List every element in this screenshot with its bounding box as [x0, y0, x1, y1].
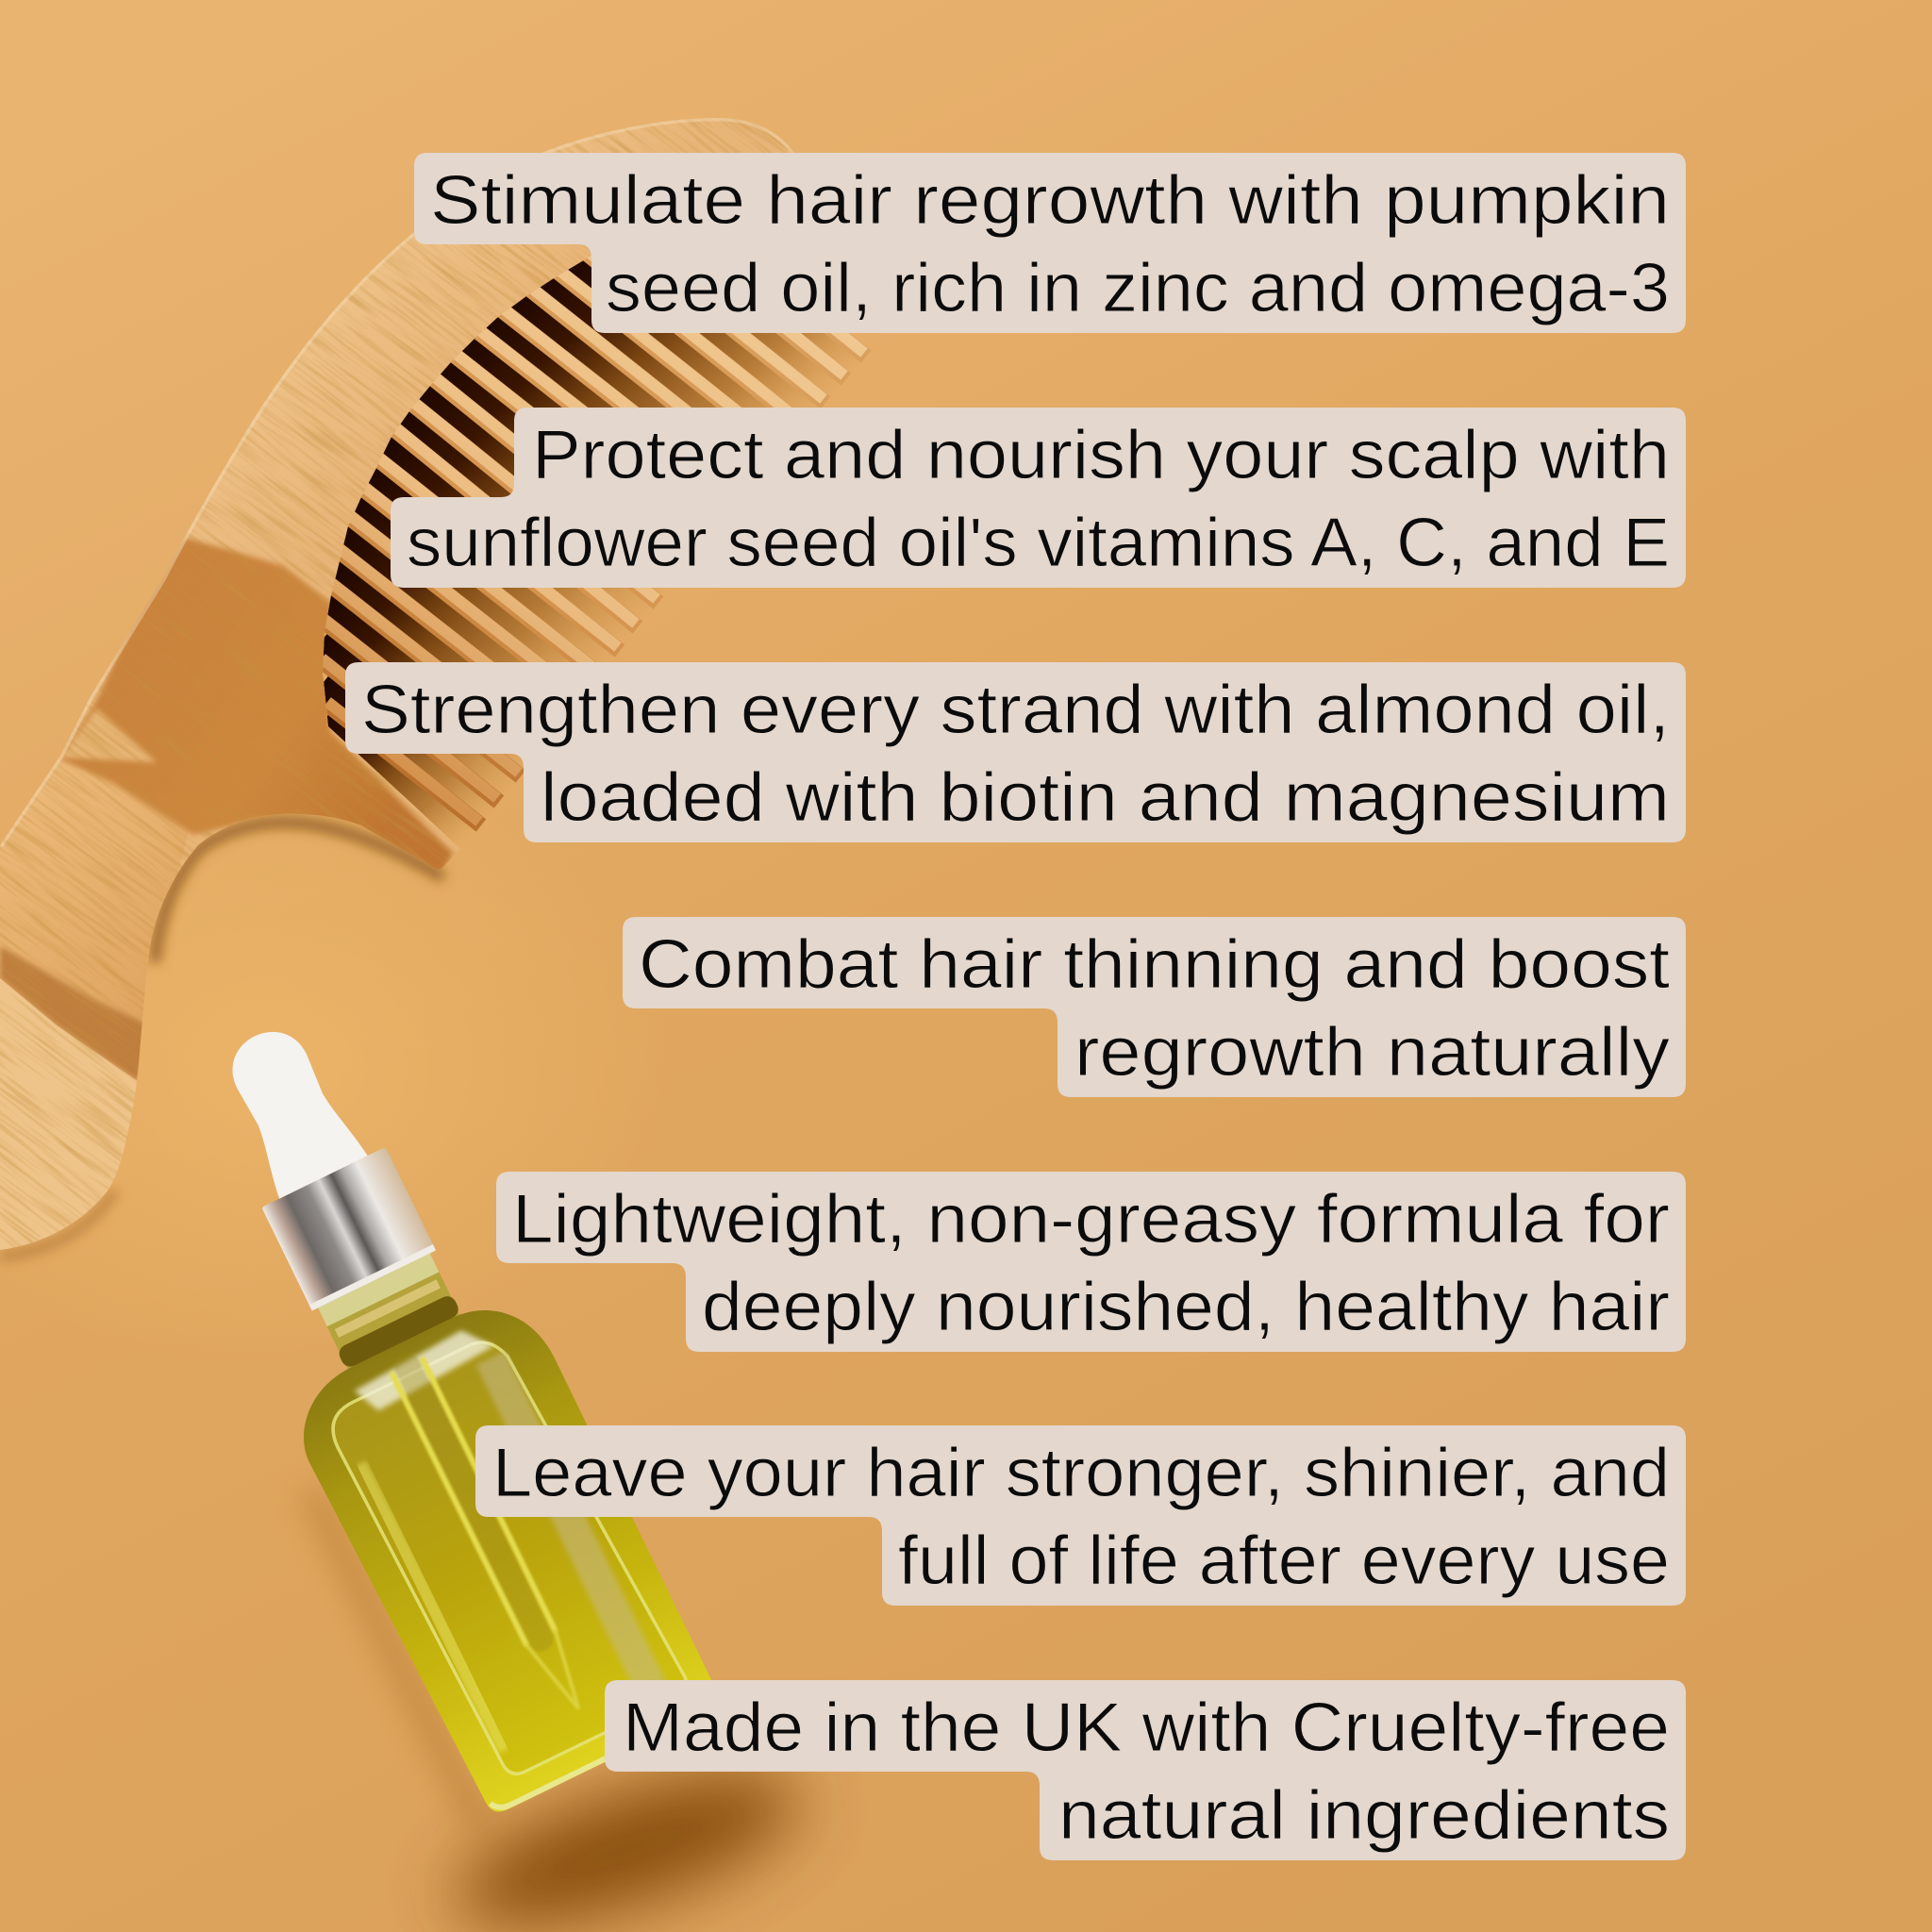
benefit 1: seed oil, rich in zinc and omega-3 [606, 250, 1670, 326]
benefit 3 [345, 662, 1686, 842]
benefit 5 [496, 1172, 1686, 1352]
bottle glass body [280, 1286, 724, 1821]
comb dark grain band [0, 946, 151, 1082]
benefit 6 [475, 1425, 1686, 1606]
oil dropper bottle [131, 980, 724, 1821]
gaps between comb teeth [322, 208, 856, 841]
benefit 7: Made in the UK with Cruelty-free [623, 1690, 1670, 1766]
comb wood grain [0, 119, 792, 1247]
benefit 2: sunflower seed oil's vitamins A, C, and E [407, 505, 1670, 581]
comb dark grain section [60, 538, 453, 877]
bottle neck [313, 1245, 470, 1387]
comb teeth [321, 198, 866, 825]
metal collar [261, 1147, 436, 1310]
benefit 4: regrowth naturally [1074, 1014, 1671, 1091]
label background [623, 917, 1686, 1097]
label background [605, 1680, 1686, 1860]
label background [414, 153, 1686, 333]
benefit 2: Protect and nourish your scalp with [532, 417, 1670, 493]
benefit 4 [623, 917, 1686, 1097]
benefit 6: full of life after every use [898, 1523, 1670, 1599]
glass reflection right [476, 1351, 671, 1705]
comb mid handle section [2, 811, 188, 1023]
benefit 7 [605, 1680, 1686, 1860]
comb handle-end shadow [0, 1191, 115, 1257]
glass reflection top [351, 1321, 497, 1416]
comb body [0, 118, 794, 1250]
label background [496, 1172, 1686, 1352]
benefit 6: Leave your hair stronger, shinier, and [492, 1435, 1670, 1511]
benefit 3: Strengthen every strand with almond oil, [361, 672, 1670, 748]
benefit 2 [391, 408, 1686, 588]
comb handle tip [0, 978, 139, 1259]
benefit 5: Lightweight, non-greasy formula for [512, 1181, 1670, 1257]
benefit 5: deeply nourished, healthy hair [702, 1269, 1670, 1345]
benefit 3: loaded with biotin and magnesium [541, 759, 1670, 836]
label background [391, 408, 1686, 588]
label background [475, 1425, 1686, 1606]
benefit 4: Combat hair thinning and boost [639, 926, 1670, 1003]
rubber dropper bulb [210, 1015, 368, 1199]
dropper tube [392, 1359, 591, 1718]
bottle cast shadow [311, 1491, 815, 1932]
bottle base rim [491, 1694, 719, 1812]
wooden comb [0, 0, 1539, 1671]
comb light grain wedge [60, 708, 157, 762]
inner glass chamber [323, 1324, 691, 1783]
benefit 1 [414, 153, 1686, 333]
comb cast shadow [155, 823, 443, 962]
glass reflection left [358, 1461, 506, 1753]
comb top-edge highlight [0, 118, 794, 845]
label background [345, 662, 1686, 842]
benefit 7: natural ingredients [1058, 1777, 1670, 1854]
benefit 1: Stimulate hair regrowth with pumpkin [430, 162, 1670, 239]
